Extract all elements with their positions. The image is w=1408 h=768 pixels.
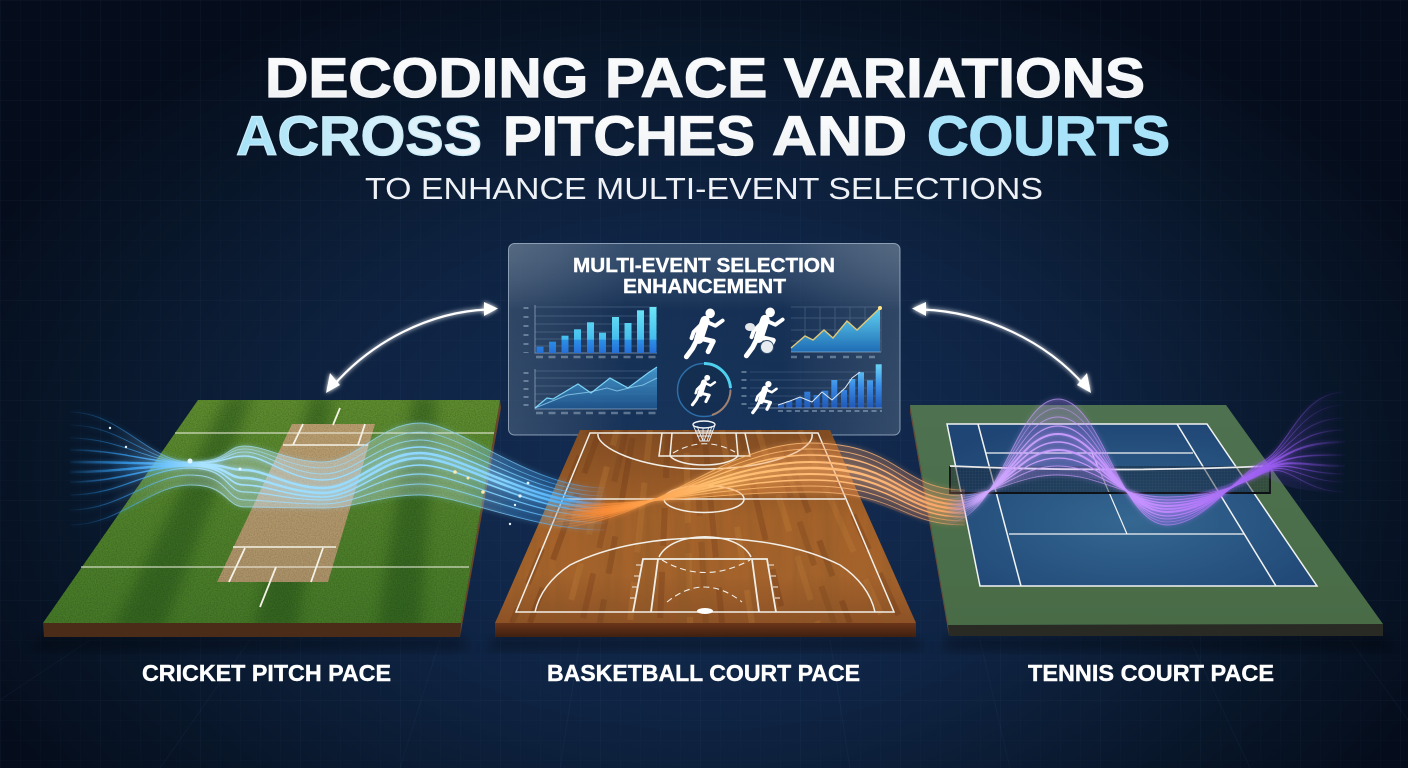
court lines <box>947 424 1317 586</box>
wave: basketball pace (orange) <box>545 443 965 528</box>
soil base <box>43 623 461 637</box>
label: cricket pitch pace: CRICKET PITCH PACE <box>142 660 391 686</box>
arrow: panel to tennis <box>912 302 1091 393</box>
icon: player with balls <box>745 308 783 356</box>
wood planks <box>512 430 902 623</box>
panel heading: ENHANCEMENT <box>623 276 786 298</box>
panel: basketball court <box>486 421 925 650</box>
label: basketball court pace: BASKETBALL COURT PACE <box>547 660 860 686</box>
baseline basket marker <box>697 608 713 614</box>
wave: cricket pace (blue) <box>70 412 605 530</box>
panel glass <box>508 244 900 435</box>
tennis shadow <box>940 636 1395 650</box>
pitch strip <box>217 424 375 582</box>
panel: cricket pitch <box>30 395 501 650</box>
grass texture <box>43 400 500 623</box>
icon: small runner <box>753 381 777 413</box>
blue sparkles <box>109 427 529 525</box>
pitch texture <box>217 424 375 582</box>
purple wave strands <box>945 392 1345 525</box>
icon: runner in progress ring <box>678 363 730 416</box>
title word: pitches: PITCHES <box>503 104 755 167</box>
orange haze band <box>545 443 965 528</box>
panel heading <box>573 255 835 298</box>
orange wave strands <box>545 443 965 528</box>
mowing stripes <box>113 395 437 630</box>
title word: courts: COURTS <box>927 104 1170 167</box>
net <box>950 466 1270 494</box>
panel: tennis court <box>910 405 1395 650</box>
title line 1: DECODING PACE VARIATIONS <box>265 46 1145 109</box>
court base <box>948 624 1383 636</box>
crease lines <box>81 408 494 607</box>
label: tennis court pace: TENNIS COURT PACE <box>1028 660 1274 686</box>
blue wave strands <box>70 412 605 530</box>
right soil edge <box>460 400 501 637</box>
title word: and: AND <box>772 104 907 167</box>
title <box>236 46 1170 167</box>
blue haze band <box>70 412 605 530</box>
basketball hoop <box>693 421 715 441</box>
chart: bars top left <box>526 305 658 357</box>
green surround <box>910 405 1383 625</box>
title word: across: ACROSS <box>236 104 482 167</box>
grass surface <box>43 400 500 623</box>
court shadow <box>486 637 925 650</box>
pitch shadow <box>30 636 470 650</box>
subtitle: TO ENHANCE MULTI-EVENT SELECTIONS <box>365 171 1043 206</box>
wood surface <box>495 430 916 623</box>
panel heading: MULTI-EVENT SELECTION <box>573 255 835 277</box>
chart: area bottom left <box>526 367 657 413</box>
panel: multi-event selection enhancement <box>508 244 900 435</box>
chart: area top right <box>791 306 882 357</box>
blue playing surface <box>947 424 1317 586</box>
icon: runner <box>686 309 723 357</box>
chart: bars bottom right <box>744 364 882 411</box>
wave: tennis pace (purple) <box>945 392 1345 525</box>
wood grain <box>495 430 916 623</box>
court markings <box>516 433 894 612</box>
arrow: cricket to panel <box>326 302 498 393</box>
court base <box>495 623 916 637</box>
purple haze band <box>945 392 1345 525</box>
left base edge <box>910 405 949 636</box>
